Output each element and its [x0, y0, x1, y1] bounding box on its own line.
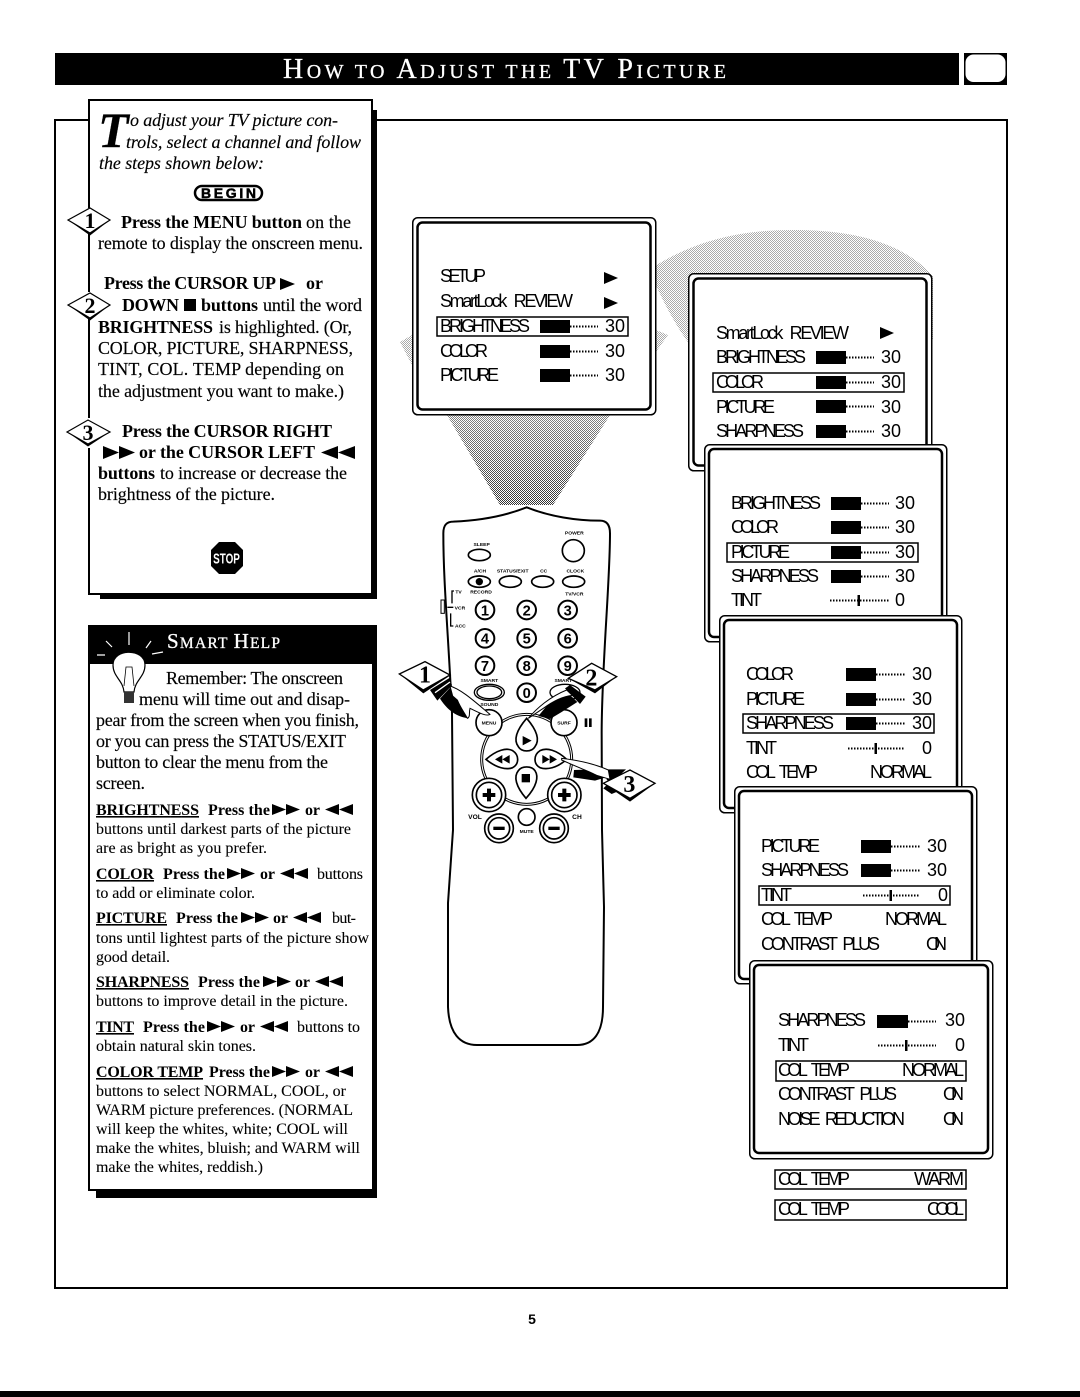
brightness help	[96, 802, 353, 857]
step 2: TINT, COL. TEMP depending on	[98, 359, 344, 379]
icon: tv screen	[964, 53, 1007, 85]
tv menu 4: NORMAL	[870, 762, 932, 782]
number keypad: 6	[564, 632, 572, 648]
tv menu 2: 30	[881, 397, 901, 417]
color help: Press the	[163, 866, 225, 883]
tv menu 3: TINT	[731, 590, 762, 610]
volume and channel buttons	[468, 778, 582, 843]
tv menu 4: 30	[912, 664, 932, 684]
color temp help: or	[305, 1064, 320, 1081]
tv menu 6: NOISE REDUCTION	[778, 1109, 905, 1129]
number keypad: 5	[523, 632, 531, 648]
menu and surf buttons	[476, 710, 592, 736]
picture help: PICTURE	[96, 910, 167, 927]
step 3: buttons	[98, 463, 155, 483]
remote body	[443, 507, 610, 1045]
tv menu 5	[735, 787, 977, 984]
picture help	[96, 910, 369, 966]
tv menu 2: SHARPNESS	[716, 421, 804, 441]
step 3: brightness of the picture.	[98, 484, 275, 504]
cursor ring	[482, 714, 572, 804]
menu and surf buttons: SURF	[557, 721, 571, 727]
tv menu 3: SHARPNESS	[731, 566, 819, 586]
top buttons	[468, 530, 585, 598]
tint help: or	[240, 1019, 255, 1036]
panel: smart help	[88, 625, 377, 1198]
number keypad	[476, 601, 577, 702]
tv menu 2: SmartLock REVIEW	[716, 323, 849, 343]
top buttons: CC	[540, 569, 548, 575]
color temp help: Press the	[209, 1064, 270, 1081]
tv menu 2: BRIGHTNESS	[716, 347, 806, 367]
tv menu 3: 30	[895, 542, 915, 562]
picture help: Press the	[176, 910, 238, 927]
tv menu 5: NORMAL	[885, 909, 947, 929]
sharpness help: Press the	[198, 974, 260, 991]
tv menu 3: COLOR	[731, 517, 779, 537]
tv menu 5: TINT	[761, 885, 792, 905]
tv menu 1: 30	[605, 365, 625, 385]
color temp help: make the whites, bluish; and WARM will	[96, 1140, 361, 1157]
sharpness help: SHARPNESS	[96, 974, 189, 991]
color help: or	[260, 866, 275, 883]
mode switch: ACC	[455, 623, 466, 629]
title bar: HOW TO ADJUST THE TV PICTURE	[283, 54, 726, 85]
tv menu 3: 30	[895, 517, 915, 537]
step 2: is highlighted. (Or,	[219, 317, 352, 338]
icon: light bulb	[97, 632, 163, 703]
tv menu 6: COL TEMP	[778, 1060, 850, 1080]
smart buttons	[474, 678, 580, 708]
step 1: 1	[84, 208, 96, 233]
step 3	[67, 420, 355, 504]
tint help: Press the	[143, 1019, 205, 1036]
tv menu 2	[689, 274, 932, 471]
tv menu 4: SHARPNESS	[746, 713, 834, 733]
drop cap and intro text: trols, select a channel and follow	[126, 132, 361, 152]
step 2: DOWN	[122, 295, 179, 315]
picture help: good detail.	[96, 949, 170, 966]
tv menu 4: 30	[912, 689, 932, 709]
color temp help: COLOR TEMP	[96, 1064, 203, 1081]
step 2: buttons	[201, 295, 258, 315]
drop cap and intro text: o adjust your TV picture con-	[130, 110, 338, 130]
drop cap and intro text: the steps shown below:	[99, 153, 264, 173]
smart help intro text: pear from the screen when you finish,	[96, 710, 359, 730]
tv menu 3: 30	[895, 566, 915, 586]
number keypad: 1	[481, 603, 489, 619]
tv menu 3: PICTURE	[731, 542, 790, 562]
smart help intro text: button to clear the menu from the	[96, 752, 328, 772]
tv menu 5: 0	[938, 885, 948, 905]
step 2: until the word	[263, 295, 362, 315]
tv menu 1	[413, 218, 656, 415]
hand pointer 1: 1	[419, 663, 431, 689]
tv menu 4: TINT	[746, 738, 777, 758]
tv menu 1: PICTURE	[440, 365, 499, 385]
color temp help: buttons to select NORMAL, COOL, or	[96, 1083, 347, 1100]
mode switch: TV	[455, 590, 462, 596]
tv menu 6: ON	[943, 1084, 964, 1104]
step 2: Press the CURSOR UP	[104, 273, 276, 293]
tv menu 5: 30	[927, 860, 947, 880]
top buttons: RECORD	[470, 590, 492, 596]
drop cap and intro text: T	[98, 102, 131, 158]
page number: 5	[528, 1311, 536, 1327]
mode switch: VCR	[455, 606, 466, 612]
top buttons: TV/VCR	[565, 592, 584, 598]
picture help: or	[273, 910, 288, 927]
tv menu 1: 30	[605, 341, 625, 361]
number keypad: 3	[564, 603, 572, 619]
color help: COLOR	[96, 866, 154, 883]
color temp help: will keep the whites, white; COOL will	[96, 1121, 349, 1138]
color temp help: make the whites, reddish.)	[96, 1159, 263, 1176]
step 2: or	[306, 273, 323, 293]
smart help intro text: menu will time out and disap-	[139, 689, 350, 709]
hand pointer 2	[528, 663, 617, 719]
tv menu 5: 30	[927, 836, 947, 856]
brightness help: BRIGHTNESS	[96, 802, 199, 819]
picture help: tons until lightest parts of the picture show	[96, 930, 369, 947]
hand pointer 2: 2	[585, 665, 597, 691]
menu and surf buttons: MENU	[482, 721, 497, 727]
hand pointer 1	[399, 662, 490, 718]
tv menu 4: PICTURE	[746, 689, 805, 709]
top buttons: SLEEP	[473, 542, 491, 548]
step 2: 2	[84, 293, 96, 318]
volume and channel buttons: VOL	[468, 814, 482, 821]
beam: to stacked menus	[400, 230, 933, 365]
remote control	[399, 507, 655, 1045]
icon: stop sign	[211, 542, 243, 574]
tv menu 5: PICTURE	[761, 836, 820, 856]
tv menu 6: 30	[945, 1010, 965, 1030]
color help: buttons	[317, 866, 363, 883]
tv menu 6: SHARPNESS	[778, 1010, 866, 1030]
step 3: to increase or decrease the	[160, 463, 347, 483]
tv menu 1: COLOR	[440, 341, 488, 361]
tv menu 1: 30	[605, 316, 625, 336]
tv menu 1: BRIGHTNESS	[440, 316, 530, 336]
smart buttons: SMART	[480, 678, 498, 684]
tint help: buttons to	[297, 1019, 360, 1036]
number keypad: 2	[523, 603, 531, 619]
volume and channel buttons: MUTE	[520, 829, 534, 835]
tv menu 2: 30	[881, 372, 901, 392]
color help: to add or eliminate color.	[96, 885, 255, 902]
bottom edge bar	[0, 1391, 1080, 1397]
tv menu 3: 30	[895, 493, 915, 513]
tv menu 5: CONTRAST PLUS	[761, 934, 880, 954]
number keypad: 4	[481, 632, 490, 648]
smart help intro text: or you can press the STATUS/EXIT	[96, 731, 346, 751]
tv menu 2: 30	[881, 347, 901, 367]
brightness help: Press the	[208, 802, 270, 819]
brightness help: or	[305, 802, 320, 819]
step 2: the adjustment you want to make.)	[98, 381, 344, 402]
top buttons: POWER	[565, 530, 584, 536]
smart help intro text	[96, 668, 359, 793]
tv menu 2: COLOR	[716, 372, 764, 392]
tv menu 3: BRIGHTNESS	[731, 493, 821, 513]
tv menu 6: ON	[943, 1109, 964, 1129]
step 1: on the	[306, 212, 351, 232]
icon: stop sign: STOP	[213, 551, 240, 567]
step 3: or the CURSOR LEFT	[139, 442, 315, 462]
step 1: Press the MENU button	[121, 212, 302, 232]
tv menu 4: 30	[912, 713, 932, 733]
col temp warm option: COL TEMP	[778, 1169, 850, 1189]
tv menu 5: ON	[926, 934, 947, 954]
beam: remote to first menu	[447, 415, 610, 505]
brightness help: are as bright as you prefer.	[96, 840, 267, 857]
tv menu 5: COL TEMP	[761, 909, 833, 929]
tv menu 1: SETUP	[440, 266, 486, 286]
step 1: remote to display the onscreen menu.	[98, 233, 363, 253]
tv menu 3: 0	[895, 590, 905, 610]
mode switch	[441, 590, 466, 629]
number keypad: 9	[564, 659, 572, 675]
color temp help	[96, 1064, 361, 1176]
smart help intro text: screen.	[96, 773, 145, 793]
smart buttons: SOUND	[480, 702, 499, 708]
col temp warm option: WARM	[914, 1169, 964, 1189]
sharpness help: buttons to improve detail in the picture.	[96, 993, 348, 1010]
tv menu 6: 0	[955, 1035, 965, 1055]
top buttons: CLOCK	[566, 569, 585, 575]
smart help header	[88, 625, 377, 664]
outer frame	[55, 120, 1007, 1288]
step 1	[68, 208, 363, 253]
number keypad: 0	[523, 686, 531, 702]
begin badge: BEGIN	[201, 185, 256, 201]
step 2: BRIGHTNESS	[98, 317, 213, 337]
tv menu 6: NORMAL	[902, 1060, 964, 1080]
title bar	[55, 53, 959, 85]
tv menu 3	[705, 445, 947, 642]
step 2: COLOR, PICTURE, SHARPNESS,	[98, 338, 353, 358]
step 2	[68, 273, 362, 402]
col temp cool option: COOL	[927, 1199, 964, 1219]
col temp cool option: COL TEMP	[778, 1199, 850, 1219]
brightness help: buttons until darkest parts of the picture	[96, 821, 351, 838]
smart buttons: SMART	[554, 678, 572, 684]
top buttons: A/CH	[474, 569, 486, 575]
smart help header: SMART HELP	[167, 629, 280, 653]
panel: steps	[67, 100, 377, 599]
number keypad: 7	[481, 659, 489, 675]
sharpness help	[96, 974, 348, 1010]
hand pointer 3: 3	[623, 772, 635, 798]
tv menu 4: 0	[922, 738, 932, 758]
step 3: Press the CURSOR RIGHT	[122, 421, 332, 441]
tv menu 4	[720, 616, 962, 813]
tint help	[96, 1019, 360, 1055]
drop cap and intro text	[98, 102, 361, 173]
step 3: 3	[82, 420, 94, 445]
volume and channel buttons: CH	[572, 814, 582, 821]
tv menu 4: COLOR	[746, 664, 794, 684]
top buttons: STATUS/EXIT	[497, 569, 529, 575]
color temp help: WARM picture preferences. (NORMAL	[96, 1102, 353, 1119]
tv menu 1: SmartLock REVIEW	[440, 291, 573, 311]
tint help: obtain natural skin tones.	[96, 1038, 256, 1055]
tv menu 4: COL TEMP	[746, 762, 818, 782]
tv menu 5: SHARPNESS	[761, 860, 849, 880]
smart help intro text: Remember: The onscreen	[166, 668, 343, 688]
tv menu 6	[750, 961, 993, 1159]
color help	[96, 866, 363, 902]
tv menu 6: CONTRAST PLUS	[778, 1084, 897, 1104]
tv menu 2: PICTURE	[716, 397, 775, 417]
number keypad: 8	[523, 659, 531, 675]
hand pointer 3	[562, 758, 655, 802]
col temp cool option	[775, 1199, 966, 1220]
tv menu 2: 30	[881, 421, 901, 441]
tv menu 6: TINT	[778, 1035, 809, 1055]
tint help: TINT	[96, 1019, 134, 1036]
picture help: but-	[332, 910, 356, 927]
sharpness help: or	[295, 974, 310, 991]
col temp warm option	[775, 1169, 966, 1189]
